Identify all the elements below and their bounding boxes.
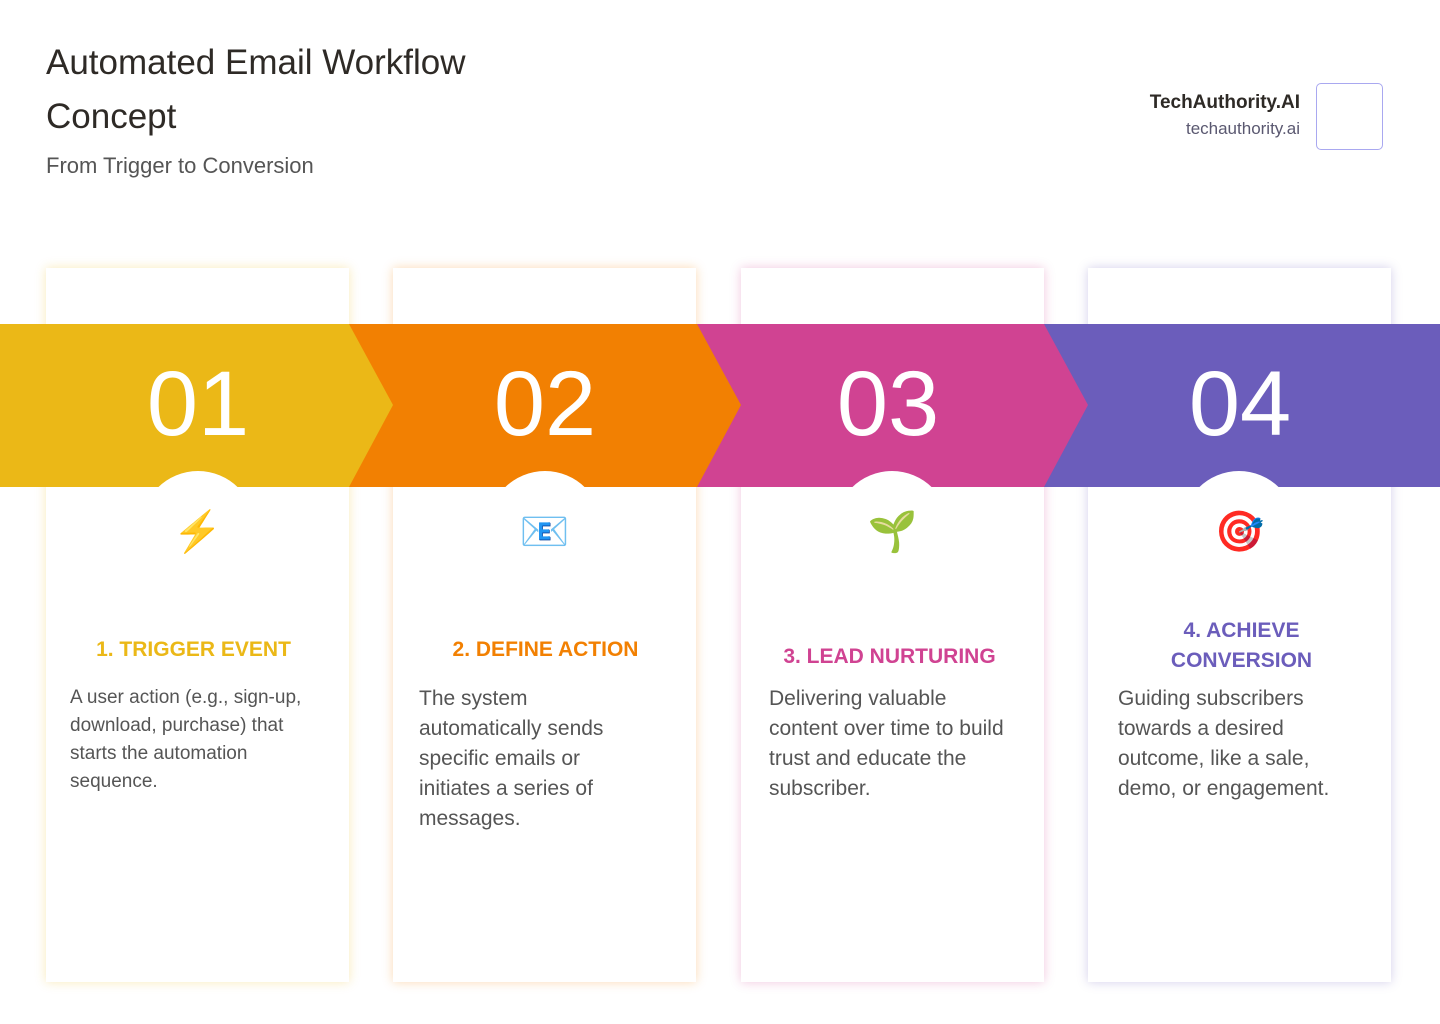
text: 🌱 bbox=[868, 510, 917, 554]
arrow band: 04 bbox=[1189, 353, 1291, 455]
text: A user action (e.g., sign-up, bbox=[70, 687, 301, 708]
text: subscriber. bbox=[769, 777, 871, 800]
title bbox=[46, 43, 466, 136]
text: specific emails or bbox=[419, 747, 580, 770]
step 4 text bbox=[1171, 619, 1312, 672]
text: content over time to build bbox=[769, 717, 1004, 740]
text: initiates a series of bbox=[419, 777, 593, 800]
text: starts the automation bbox=[70, 743, 247, 764]
text: The system bbox=[419, 687, 528, 710]
text: Delivering valuable bbox=[769, 687, 946, 710]
arrow band: 01 bbox=[147, 353, 249, 455]
card 2 bbox=[393, 268, 696, 982]
arrow band: 03 bbox=[837, 353, 939, 455]
step 1 text: 1. TRIGGER EVENT bbox=[96, 638, 291, 661]
brand: TechAuthority.AI bbox=[1150, 92, 1300, 113]
text: sequence. bbox=[70, 771, 158, 792]
step 3 text: 3. LEAD NURTURING bbox=[783, 645, 996, 668]
text: messages. bbox=[419, 807, 521, 830]
step 4 text: 4. ACHIEVE bbox=[1184, 619, 1299, 642]
arrow band: 02 bbox=[494, 353, 596, 455]
logo box bbox=[1316, 83, 1383, 150]
step 4 text: CONVERSION bbox=[1171, 649, 1312, 672]
text: 📧 bbox=[520, 510, 569, 554]
card 1 bbox=[46, 268, 349, 982]
text: outcome, like a sale, bbox=[1118, 747, 1309, 770]
card 3 bbox=[741, 268, 1044, 982]
title: Automated Email Workflow bbox=[46, 43, 466, 82]
title: Concept bbox=[46, 97, 176, 136]
text: 🎯 bbox=[1215, 510, 1264, 554]
text: Guiding subscribers bbox=[1118, 687, 1304, 710]
text: demo, or engagement. bbox=[1118, 777, 1329, 800]
icons: ⚡ bbox=[173, 510, 222, 554]
step 2 text: 2. DEFINE ACTION bbox=[453, 638, 638, 661]
brand bbox=[1150, 92, 1300, 138]
text: towards a desired bbox=[1118, 717, 1284, 740]
text: download, purchase) that bbox=[70, 715, 283, 736]
text: trust and educate the bbox=[769, 747, 966, 770]
text: automatically sends bbox=[419, 717, 603, 740]
subtitle: From Trigger to Conversion bbox=[46, 153, 314, 178]
brand: techauthority.ai bbox=[1186, 119, 1300, 138]
card 4 bbox=[1088, 268, 1391, 982]
